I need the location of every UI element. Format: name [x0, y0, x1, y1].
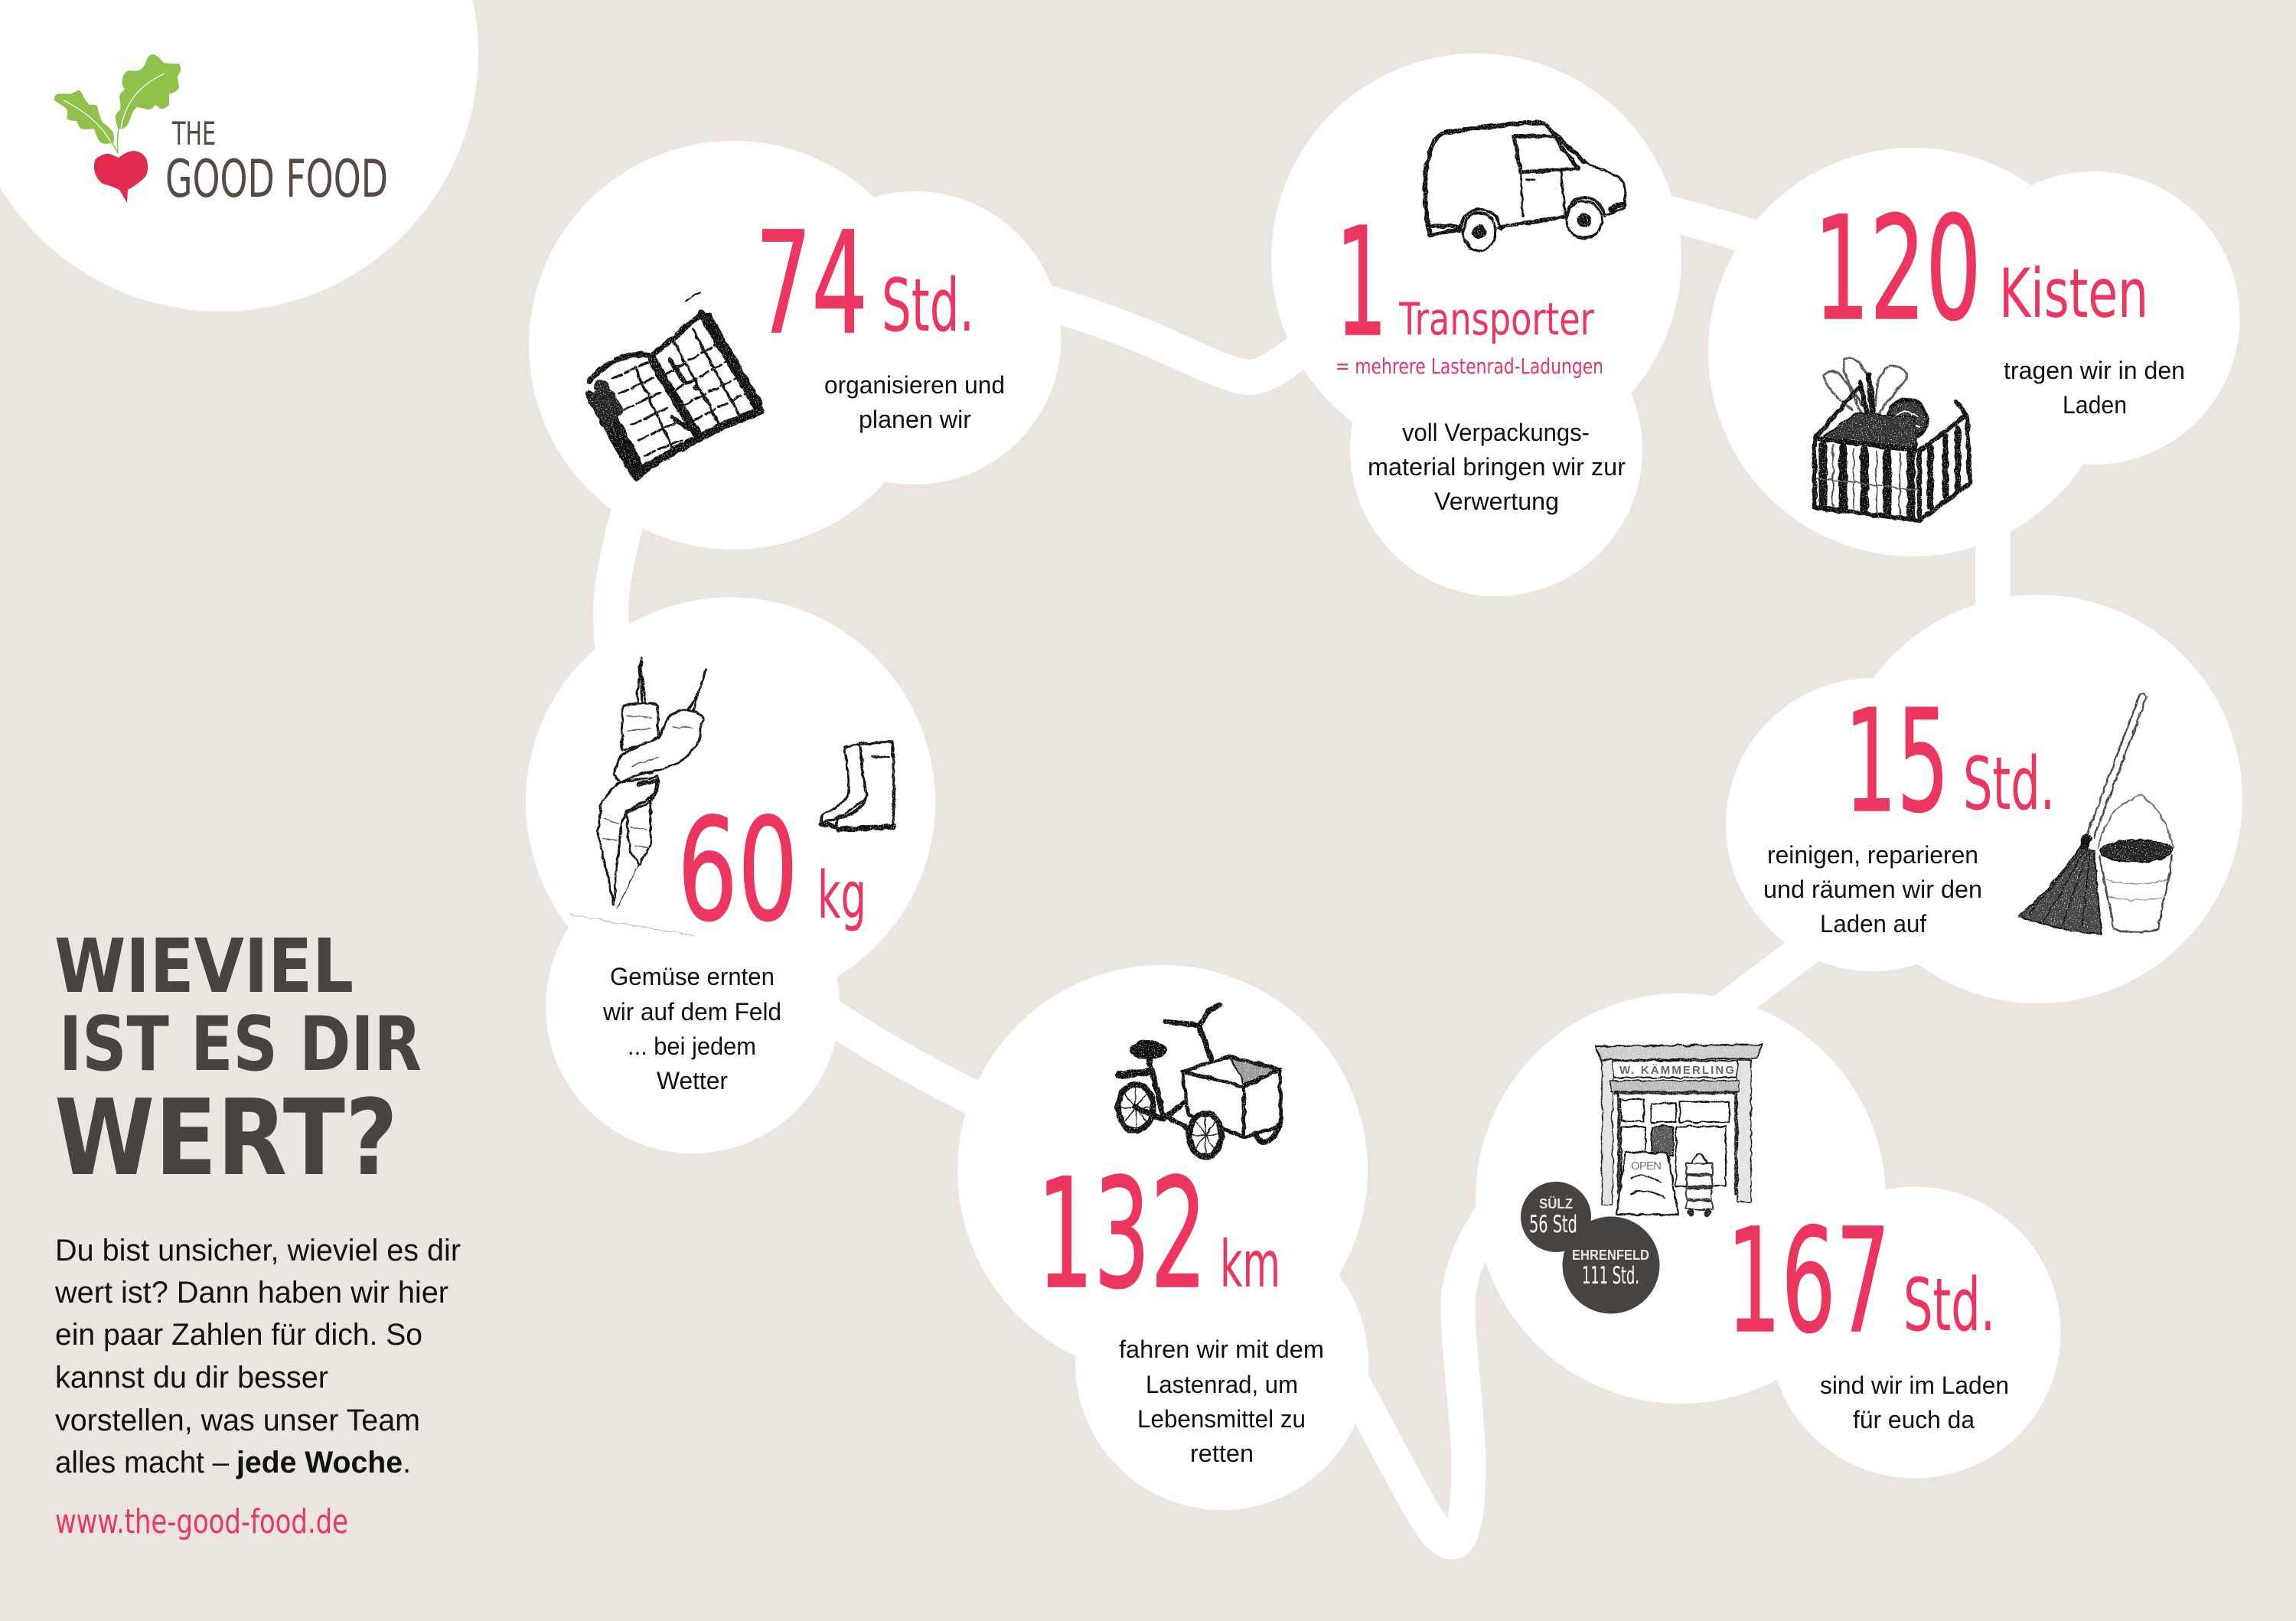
intro text block: jede Woche	[236, 1446, 403, 1479]
description: material bringen wir zur	[1368, 453, 1626, 481]
intro text block: alles macht –	[55, 1446, 230, 1479]
panel: logo disc	[0, 0, 478, 311]
connecting route path	[611, 208, 1993, 1542]
description: retten	[1190, 1440, 1254, 1467]
stat: 120 Kisten: Kisten	[1999, 254, 2148, 333]
intro text block: ein paar Zahlen für dich. So	[55, 1318, 422, 1352]
A-board lettering: OPEN	[1631, 1159, 1662, 1173]
description: voll Verpackungs-	[1402, 419, 1590, 446]
description: Lebensmittel zu	[1137, 1405, 1306, 1433]
logo wordmark	[165, 115, 388, 210]
badge: Ehrenfeld: EHRENFELD	[1572, 1248, 1649, 1263]
stat: 15 Std.: 15	[1844, 679, 1949, 844]
description: Lastenrad, um	[1146, 1371, 1298, 1398]
shop sign lettering: W. KÄMMERLING	[1619, 1064, 1734, 1077]
panel: 74 hours planning	[529, 141, 1061, 550]
description: Verwertung	[1434, 488, 1559, 515]
panel: 132 km cargo bike	[957, 965, 1368, 1510]
description: Laden auf	[1820, 910, 1926, 938]
stat: 1 Transporter: = mehrere Lastenrad-Ladungen	[1336, 354, 1603, 379]
intro text block	[54, 1234, 461, 1479]
description	[1763, 841, 1982, 938]
stat: 74 Std.: Std.	[882, 264, 974, 348]
panel: 1 transporter	[1271, 54, 1681, 596]
badge: Ehrenfeld: 111 Std.	[1582, 1262, 1639, 1290]
description	[824, 371, 1005, 433]
icon: open book sketch	[589, 291, 760, 476]
icon: van sketch	[1425, 122, 1626, 251]
description: wir auf dem Feld	[602, 998, 781, 1026]
icon: shop front sketch	[1595, 1045, 1763, 1216]
description: ... bei jedem	[628, 1032, 756, 1060]
description: fahren wir mit dem	[1119, 1336, 1324, 1363]
description	[1119, 1336, 1324, 1467]
icon: twisted carrots sketch	[570, 659, 706, 935]
description: und räumen wir den	[1763, 876, 1982, 903]
intro text block: .	[403, 1446, 411, 1479]
logo wordmark: THE	[171, 115, 216, 152]
title: WIEVIEL	[54, 923, 354, 1009]
stat: 167 Std.: 167	[1727, 1198, 1890, 1365]
badge: Ehrenfeld	[1563, 1217, 1659, 1313]
description: für euch da	[1853, 1406, 1975, 1433]
icon: broom and bucket sketch	[2019, 693, 2173, 934]
badge: Sülz: 56 Std.	[1529, 1211, 1582, 1238]
description: reinigen, reparieren	[1767, 841, 1978, 869]
stat: 167 Std.: Std.	[1903, 1264, 1995, 1348]
intro text block: kannst du dir besser	[55, 1361, 328, 1394]
badge: Sülz: SÜLZ	[1539, 1196, 1573, 1212]
badge: Sülz	[1521, 1182, 1591, 1252]
icon: cargo bike sketch	[1117, 1005, 1281, 1156]
description	[1820, 1371, 2009, 1433]
title	[54, 923, 422, 1199]
description: sind wir im Laden	[1820, 1371, 2009, 1399]
description: tragen wir in den	[2004, 357, 2185, 384]
stat: 132 km: km	[1220, 1227, 1280, 1302]
stat: 132 km: 132	[1037, 1146, 1207, 1323]
panel: 167 hours in the shop	[1476, 993, 2060, 1479]
stat: 15 Std.: Std.	[1963, 742, 2055, 827]
stat: 60 kg: kg	[817, 858, 866, 934]
icon: vegetable crate sketch	[1815, 358, 1970, 520]
intro text block: vorstellen, was unser Team	[55, 1404, 420, 1437]
stat: 1 Transporter	[1336, 196, 1603, 379]
stat: 74 Std.: 74	[755, 202, 868, 366]
title: WERT?	[54, 1078, 398, 1199]
description: organisieren und	[824, 371, 1005, 399]
panel: 60 kg harvest	[526, 597, 935, 1153]
title: IST ES DIR	[59, 1001, 422, 1088]
description	[602, 963, 781, 1094]
stat: 1 Transporter: 1	[1336, 196, 1388, 370]
panel: 15 hours cleaning	[1726, 595, 2242, 1003]
website link: www.the-good-food.de	[55, 1502, 348, 1541]
description	[1368, 419, 1626, 515]
description: planen wir	[859, 406, 971, 433]
intro text block: Du bist unsicher, wieviel es dir	[55, 1234, 461, 1267]
logo wordmark: GOOD FOOD	[165, 149, 388, 210]
icon: rubber boots sketch	[821, 742, 894, 830]
stat: 1 Transporter: Transporter	[1398, 293, 1594, 345]
description: Laden	[2063, 391, 2127, 419]
stat: 60 kg: 60	[677, 788, 798, 953]
intro text block: wert ist? Dann haben wir hier	[54, 1276, 448, 1310]
stat: 120 Kisten: 120	[1814, 186, 1981, 353]
panel: 120 crates	[1708, 148, 2239, 556]
description: Gemüse ernten	[610, 963, 775, 990]
description	[2004, 357, 2185, 419]
logo: radish heart with leaves	[54, 54, 181, 203]
description: Wetter	[657, 1067, 728, 1094]
